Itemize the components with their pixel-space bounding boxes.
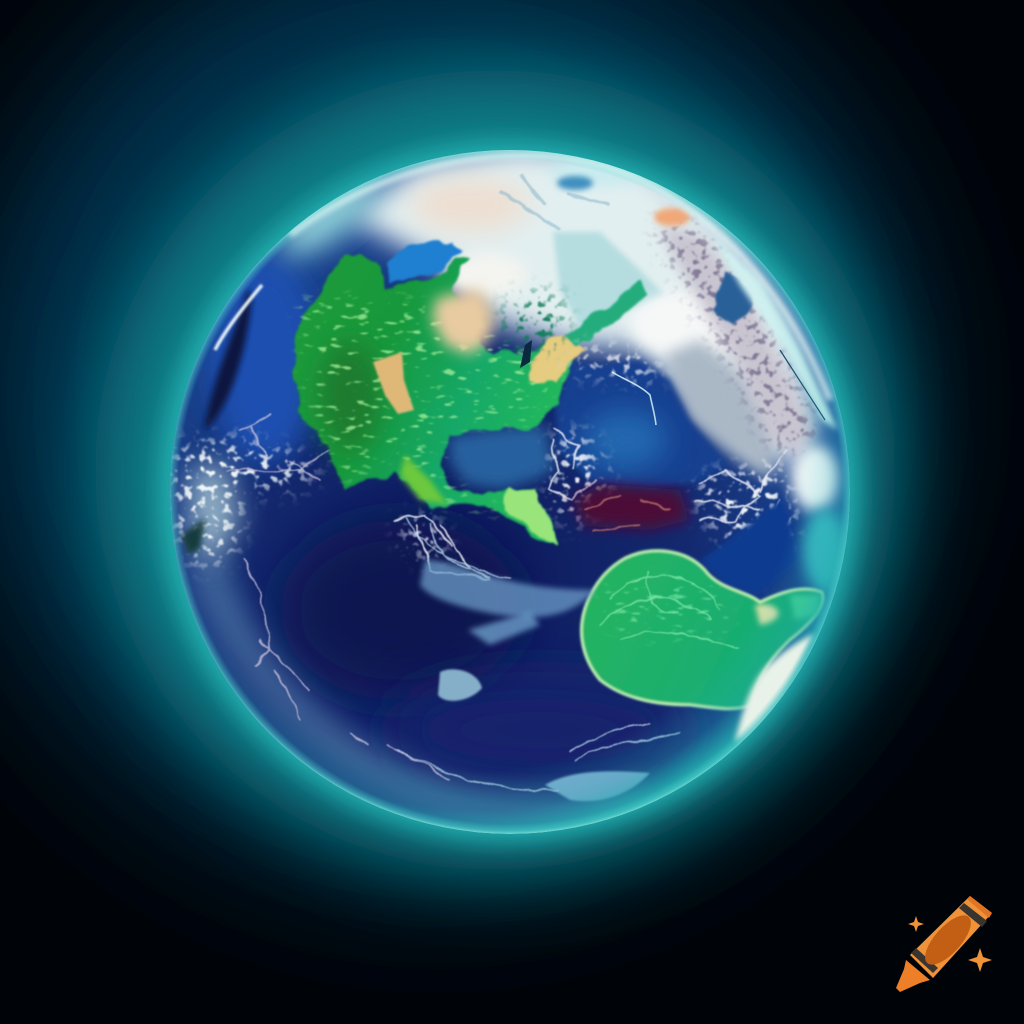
atlantic ocean basin — [555, 360, 728, 488]
ocean base — [170, 150, 850, 834]
eastern white clouds — [791, 444, 847, 592]
white island and coast lace — [400, 350, 795, 580]
ocean shading — [204, 255, 690, 780]
crayon body — [910, 896, 992, 978]
wide lower-right limb shading — [170, 150, 850, 834]
background: tight bright glow around the limb — [159, 141, 859, 841]
gulf of mexico — [448, 425, 555, 490]
background: navy haze, stronger to the upper left — [0, 0, 910, 870]
pacific cloud patches — [420, 560, 650, 801]
large sparkle — [968, 948, 992, 972]
lower-left pale limb haze — [205, 560, 650, 816]
great lakes and teal archipelago — [500, 280, 650, 368]
bright polar limb highlight — [290, 155, 830, 400]
small sparkle — [908, 916, 924, 932]
crayon cap — [967, 896, 992, 918]
eastern seaboard tan — [528, 335, 585, 385]
white southern coast streak — [735, 634, 814, 742]
hudson bay — [386, 240, 460, 282]
atlantic dark south — [700, 500, 800, 595]
icon: crayon logo with sparkles — [896, 896, 992, 992]
background: broad teal atmospheric glow — [95, 70, 895, 870]
crayon tip — [896, 960, 930, 992]
crayon oval label — [918, 908, 978, 972]
pacific current strokes — [400, 520, 680, 790]
canadian tan region — [432, 288, 495, 355]
crayon lower band — [911, 948, 938, 973]
maroon caribbean patch — [572, 484, 690, 530]
north america — [292, 254, 572, 548]
rocky mountains tan patch — [373, 352, 414, 414]
crayon upper band — [959, 903, 987, 927]
western lace clouds — [172, 440, 320, 565]
thin limb ring — [170, 150, 850, 834]
white current strokes — [395, 430, 790, 580]
maroon patch strokes — [585, 495, 670, 530]
globe: planet Earth — [170, 145, 850, 834]
south america — [581, 551, 823, 709]
eastern pink mountain band — [654, 208, 838, 460]
western ocean strokes — [230, 415, 450, 780]
arctic ice and clouds — [269, 145, 820, 480]
